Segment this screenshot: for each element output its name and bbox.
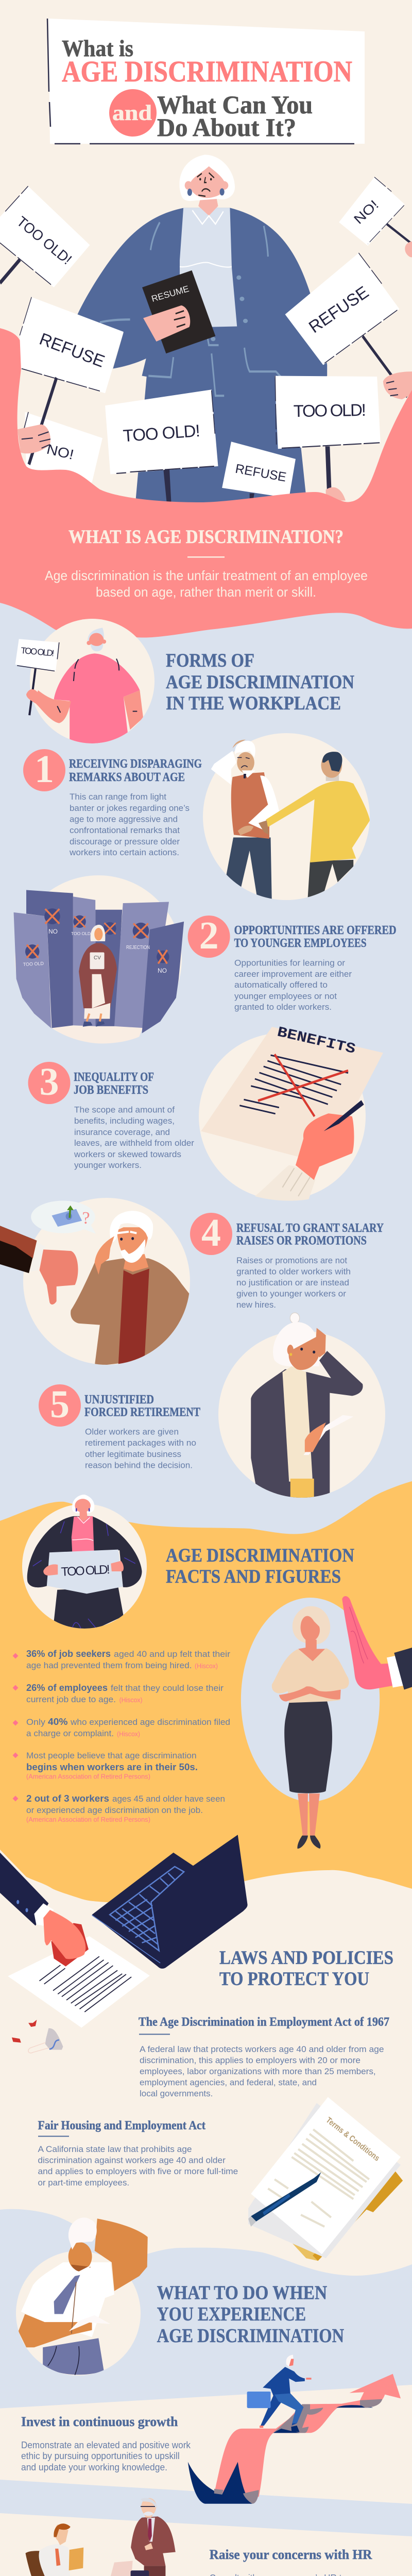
bullet: 36%	[12, 1649, 230, 1670]
item 1: disparaging remarks: age to more aggressive and	[70, 814, 178, 824]
item 3: inequality of job benefits	[28, 1060, 194, 1170]
law: ADEA 1967: local governments.	[140, 2089, 213, 2098]
bullet: 40%: Only	[26, 1717, 46, 1727]
door labels: NO	[158, 967, 167, 974]
bullet: 40%: a charge or complaint.	[26, 1728, 114, 1738]
heading: laws and policies: TO PROTECT YOU	[219, 1969, 369, 1990]
illustration: two men, thumbs down	[203, 733, 370, 908]
item 1: disparaging remarks: confrontational remarks that	[70, 825, 180, 835]
illustration: man climbing arrow	[188, 2355, 401, 2504]
bullet: 36%: aged 40 and up felt that their	[114, 1649, 230, 1659]
bullet: 2 out of 3: (American Association of Retired Persons)	[26, 1816, 150, 1823]
item 4: refusal to grant salary raises: new hires.	[236, 1300, 276, 1310]
blue lower background	[0, 2209, 412, 2576]
heading: facts and figures: AGE DISCRIMINATION	[166, 1545, 354, 1566]
heading: laws and policies	[219, 1947, 393, 1990]
bullet: 36%: age had prevented them from being hired.	[26, 1660, 192, 1670]
item 2: opportunities offered to younger employees: 2	[199, 914, 219, 957]
facts list	[12, 1649, 230, 1823]
sign: refuse left with hand	[18, 297, 124, 464]
law: ADEA 1967: The Age Discrimination in Employment Act of 1967	[139, 2015, 389, 2029]
bullet: 26%: (Hiscox)	[119, 1696, 143, 1704]
bullet: 50s	[12, 1751, 198, 1781]
heading: what to do	[157, 2282, 344, 2347]
item 3: inequality of job benefits: workers or skewed towards	[74, 1149, 181, 1159]
illustration: woman holding too old sign: TOO OLD!	[61, 1563, 110, 1579]
item 2: opportunities offered to younger employees: TO YOUNGER EMPLOYEES	[234, 937, 367, 950]
question mark: ?	[82, 1209, 90, 1228]
item 3: inequality of job benefits: INEQUALITY OF	[74, 1071, 154, 1084]
item 4: refusal to grant salary raises	[190, 1211, 384, 1310]
law: fair housing	[38, 2119, 238, 2188]
bullet: 40%: who experienced age discrimination filed	[70, 1717, 230, 1727]
tip: invest in continuous growth: and update your working knowledge.	[21, 2462, 167, 2472]
law: fair housing: Fair Housing and Employment Act	[38, 2119, 205, 2132]
title panel	[47, 19, 365, 144]
definition text: based on age, rather than merit or skill.	[96, 584, 316, 600]
item 3: inequality of job benefits: 3	[39, 1060, 59, 1104]
heading: facts and figures: FACTS AND FIGURES	[166, 1566, 341, 1587]
sign: no right: NO!	[351, 197, 382, 227]
law: fair housing: discrimination against workers age 40 and older	[38, 2156, 226, 2165]
heading: forms of age discrimination: IN THE WORKPLACE	[166, 693, 341, 714]
item 2: opportunities offered to younger employees	[188, 914, 397, 1012]
law: ADEA 1967: discrimination, this applies to employers with 20 or more	[140, 2056, 360, 2065]
item 1: disparaging remarks: RECEIVING DISPARAGING	[69, 757, 202, 771]
item 1: disparaging remarks: 1	[35, 748, 54, 791]
resume label: RESUME	[150, 284, 190, 304]
door labels: CV	[94, 955, 101, 961]
title panel: Do About It?	[157, 113, 296, 142]
yellow wave background	[0, 1481, 412, 1904]
heading: laws and policies: LAWS AND POLICIES	[219, 1947, 393, 1969]
door labels: TOO OLD	[23, 961, 44, 967]
law: ADEA 1967: A federal law that protects workers age 40 and older from age	[140, 2044, 384, 2054]
item 1: disparaging remarks: This can range from light	[70, 792, 166, 802]
pink wave panel: what is age discrimination	[0, 297, 412, 638]
bullet: 40%: (Hiscox)	[117, 1730, 140, 1738]
item 4: refusal to grant salary raises: 4	[201, 1211, 221, 1255]
tip: invest in continuous growth	[21, 2414, 191, 2472]
bullet: 26%	[12, 1683, 224, 1704]
door labels	[23, 928, 167, 974]
illustration: woman and stop hand	[241, 1596, 412, 1849]
sign: too old left: TOO OLD!	[14, 213, 75, 267]
sign: refuse small: REFUSE	[234, 462, 287, 485]
item 4: refusal to grant salary raises: REFUSAL TO GRANT SALARY	[236, 1222, 384, 1235]
bullet: 36%: 36% of job seekers	[26, 1649, 111, 1659]
law: fair housing: or part-time employees.	[38, 2178, 129, 2188]
item 2: opportunities offered to younger employees: granted to older workers.	[234, 1002, 332, 1012]
heading: forms of age discrimination: AGE DISCRIMINATION	[166, 672, 354, 693]
illustration: confused man and thumbs down	[0, 1198, 191, 1366]
item 3: inequality of job benefits: benefits, including wages,	[74, 1116, 175, 1126]
law: ADEA 1967	[139, 2015, 389, 2098]
bullet: 40%: 40%	[48, 1717, 68, 1727]
bullet: 2 out of 3	[12, 1793, 225, 1823]
illustration: terms and conditions documents: Terms & Conditions	[324, 2116, 381, 2163]
heading: what to do: YOU EXPERIENCE	[157, 2303, 306, 2325]
tip: raise concerns with HR: Raise your concerns with HR	[210, 2547, 372, 2562]
bullet: 26%: 26% of employees	[26, 1683, 108, 1693]
bullet: 2 out of 3: ages 45 and older have seen	[112, 1794, 225, 1804]
law: fair housing: and applies to employers with five or more full-time	[38, 2166, 238, 2176]
bullet: 2 out of 3: or experienced age discrimination on the job.	[26, 1805, 203, 1815]
illustration: man scratching head reading paper	[16, 2217, 148, 2376]
illustration: HR meeting scene	[25, 2498, 176, 2576]
item 3: inequality of job benefits: leaves, are withheld from older	[74, 1138, 194, 1148]
door labels: TOO OLD	[71, 931, 91, 936]
item 1: disparaging remarks: discourage or pressure older	[70, 837, 180, 846]
item 4: refusal to grant salary raises: Raises or promotions are not	[236, 1256, 347, 1265]
tip: invest in continuous growth: Invest in continuous growth	[21, 2414, 178, 2429]
sign: refuse left with hand: REFUSE	[37, 329, 107, 371]
definition text: Age discrimination is the unfair treatment of an employee	[45, 568, 368, 583]
item 2: opportunities offered to younger employees: career improvement are either	[234, 969, 352, 979]
item 2: opportunities offered to younger employees: younger employees or not	[234, 991, 337, 1001]
title panel: and	[112, 101, 152, 125]
item 3: inequality of job benefits: insurance coverage, and	[74, 1127, 170, 1137]
tip: invest in continuous growth: ethic by pursuing opportunities to upskill	[21, 2451, 180, 2461]
illustration: older man with too old sign: TOO OLD!	[21, 646, 55, 658]
item 5: unjustified forced retirement	[39, 1383, 200, 1470]
bullet: 40%	[12, 1717, 230, 1738]
sign: refuse right: REFUSE	[305, 282, 372, 336]
sign: too old right: TOO OLD!	[293, 400, 368, 420]
tip: raise concerns with HR	[210, 2547, 376, 2576]
illustration: benefits document crossed out: BENEFITS	[276, 1025, 357, 1058]
cream band: invest	[0, 2385, 412, 2504]
illustration: woman holding too old sign	[22, 1495, 147, 1636]
item 1: disparaging remarks: REMARKS ABOUT AGE	[69, 771, 185, 784]
door labels: REJECTION	[126, 945, 150, 951]
item 5: unjustified forced retirement: FORCED RETIREMENT	[84, 1405, 200, 1419]
door labels: NO	[48, 928, 58, 935]
illustration: terms and conditions documents	[248, 2097, 403, 2261]
item 5: unjustified forced retirement: other legitimate business	[85, 1449, 181, 1459]
item 5: unjustified forced retirement: Older workers are given	[85, 1427, 179, 1436]
bullet: 2 out of 3: 2 out of 3 workers	[26, 1793, 109, 1804]
item 4: refusal to grant salary raises: granted to older workers with	[236, 1266, 351, 1277]
cream band: raise	[0, 2513, 412, 2576]
definition text	[45, 568, 368, 600]
law: ADEA 1967: employment agencies, and federal, state, and	[140, 2077, 317, 2088]
item 2: opportunities offered to younger employees: Opportunities for learning or	[234, 958, 345, 968]
illustration: benefits document crossed out	[199, 1025, 383, 1201]
heading: what is age discrimination: WHAT IS AGE DISCRIMINATION?	[68, 527, 344, 548]
tip: invest in continuous growth: Demonstrate an elevated and positive work	[21, 2440, 191, 2450]
item 3: inequality of job benefits: younger workers.	[74, 1160, 142, 1170]
item 4: refusal to grant salary raises: RAISES OR PROMOTIONS	[236, 1234, 367, 1248]
item 5: unjustified forced retirement: UNJUSTIFIED	[84, 1393, 154, 1406]
sign: too old center: TOO OLD!	[123, 421, 202, 445]
heading: forms of age discrimination	[166, 650, 354, 714]
title panel: AGE DISCRIMINATION	[62, 55, 352, 88]
law: ADEA 1967: employees, labor organizations with more than 25 members,	[140, 2066, 376, 2076]
title panel: What Can You	[157, 90, 313, 119]
hero illustration: woman holding resume	[0, 155, 412, 504]
heading: what to do: WHAT TO DO WHEN	[157, 2282, 327, 2304]
heading: what to do: AGE DISCRIMINATION	[157, 2325, 344, 2347]
item 5: unjustified forced retirement: 5	[50, 1383, 70, 1426]
item 4: refusal to grant salary raises: given to younger workers or	[236, 1289, 346, 1298]
item 5: unjustified forced retirement: reason behind the decision.	[85, 1460, 193, 1470]
bullet: 50s: (American Association of Retired Persons)	[26, 1772, 150, 1781]
item 1: disparaging remarks	[23, 748, 202, 857]
item 1: disparaging remarks: banter or jokes regarding one’s	[70, 803, 190, 813]
bullet: 50s: begins when workers are in their 50s.	[26, 1762, 198, 1772]
item 2: opportunities offered to younger employees: automatically offered to	[234, 980, 328, 990]
item 1: disparaging remarks: workers into certain actions.	[69, 848, 179, 857]
bullet: 36%: (Hiscox)	[195, 1662, 218, 1670]
bullet: 26%: felt that they could lose their	[111, 1683, 224, 1693]
bullet: 50s: Most people believe that age discrimination	[26, 1751, 197, 1760]
heading: facts and figures	[166, 1545, 354, 1587]
item 3: inequality of job benefits: The scope and amount of	[74, 1105, 175, 1115]
heading: forms of age discrimination: FORMS OF	[166, 650, 254, 671]
illustration: older man with too old sign	[15, 619, 154, 744]
bullet: 26%: current job due to age.	[26, 1694, 116, 1704]
law: fair housing: A California state law that prohibits age	[38, 2144, 192, 2154]
illustration: worried woman holding paper	[218, 1313, 385, 1502]
illustration: laptop, stamp and document	[0, 1835, 248, 2053]
sign: no: NO!	[45, 442, 75, 463]
item 5: unjustified forced retirement: retirement packages with no	[85, 1438, 196, 1448]
item 3: inequality of job benefits: JOB BENEFITS	[74, 1083, 148, 1097]
title panel: What is	[62, 36, 133, 61]
illustration: closed doors and woman with CV	[14, 875, 184, 1043]
item 4: refusal to grant salary raises: no justification or are instead	[236, 1278, 349, 1287]
